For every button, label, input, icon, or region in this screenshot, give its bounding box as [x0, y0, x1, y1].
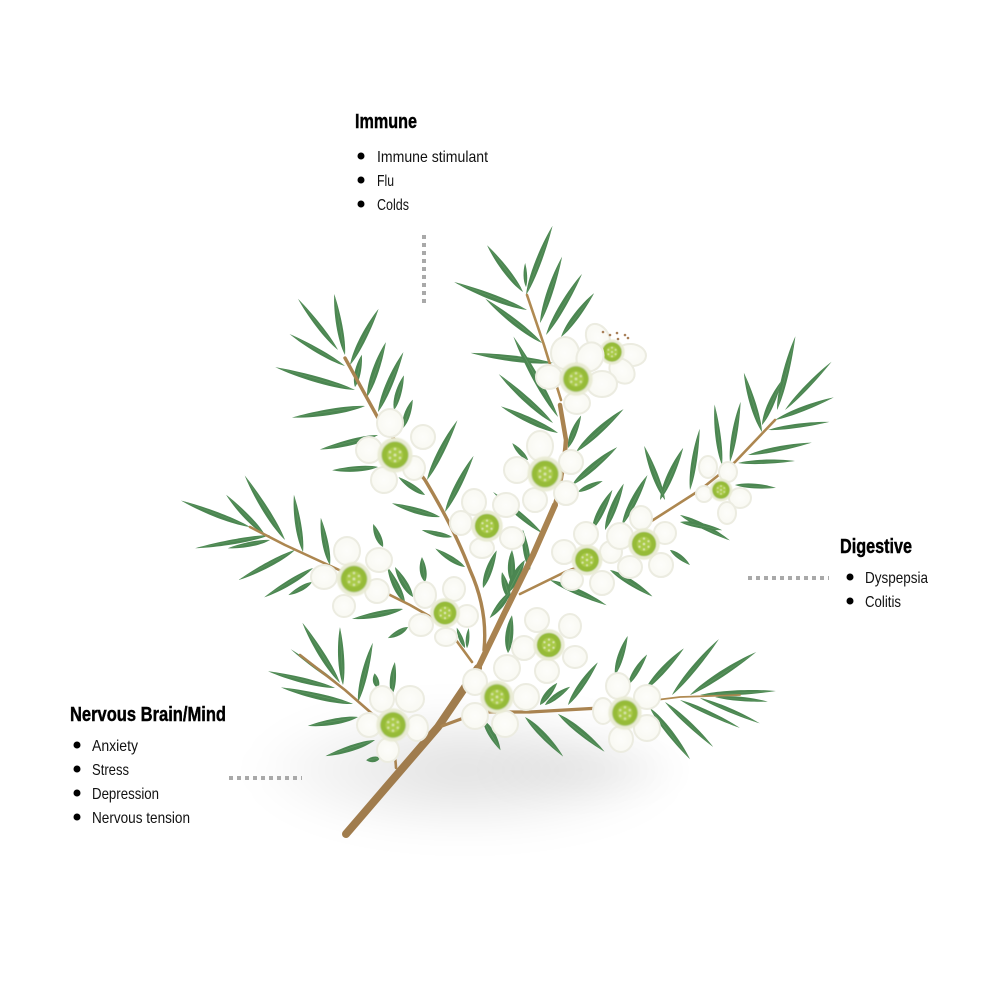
dotted connector: Immune [422, 235, 426, 303]
list: Immune items: Colds [377, 197, 409, 214]
list: Digestive items: Colitis [865, 594, 901, 611]
dotted connector: Nervous [229, 776, 302, 780]
heading: Nervous Brain/Mind: Nervous Brain/Mind [70, 704, 226, 726]
plant illustration: tea tree branch [180, 225, 835, 834]
flower: center right [552, 522, 622, 595]
list: Immune items: Immune stimulant [377, 149, 488, 166]
flower: bottom center [462, 655, 539, 737]
flower: center top [504, 431, 583, 512]
flower: right [607, 506, 676, 578]
heading: Immune: Immune [355, 111, 417, 133]
list: Nervous items: Depression [92, 786, 159, 803]
callout: Immune [355, 111, 488, 214]
leaves: upper left branch [274, 293, 533, 653]
flower: upper left [356, 409, 435, 493]
list: Nervous items: Stress [92, 762, 129, 779]
list: Nervous items: Anxiety [92, 738, 138, 755]
stems [250, 295, 775, 834]
flower: back top [581, 320, 647, 389]
list: Nervous items: Nervous tension [92, 810, 190, 827]
flower: center left [450, 489, 524, 558]
flower: bottom right [593, 673, 660, 752]
leaves: top branch [453, 225, 625, 535]
leaves: upper right branch [549, 335, 835, 608]
flower: bottom left [357, 686, 428, 762]
callout: Digestive [840, 536, 928, 611]
flower: far right [696, 456, 751, 524]
leaves: lower right branch [481, 635, 776, 761]
leaves: lower left branch [267, 621, 397, 763]
list: Immune items: Flu [377, 173, 394, 190]
leaves: left branch [180, 474, 470, 649]
list: Digestive items [846, 570, 928, 611]
list: Nervous items [74, 738, 190, 827]
soft shadow under branch [245, 700, 690, 840]
dotted connector: Digestive [748, 576, 829, 580]
flower: top [536, 337, 617, 414]
heading: Digestive: Digestive [840, 536, 912, 558]
callout: Nervous Brain/Mind [70, 704, 226, 827]
flower: mid left [409, 577, 478, 646]
flower: left [311, 537, 392, 617]
list: Digestive items: Dyspepsia [865, 570, 928, 587]
list: Immune items [358, 149, 488, 214]
flower: lower center [512, 608, 587, 683]
